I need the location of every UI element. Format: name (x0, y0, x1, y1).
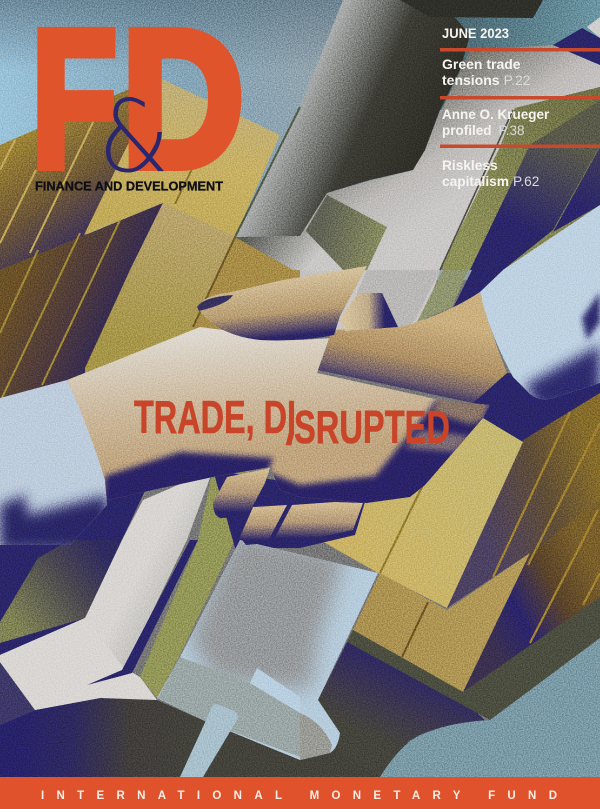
lower right box (320, 373, 600, 692)
teaser: riskless capitalism: Riskless (442, 158, 498, 173)
teaser: green trade: tensions (442, 72, 500, 88)
masthead logo (32, 0, 244, 208)
teaser: riskless capitalism: capitalism (442, 174, 509, 189)
issue date: JUNE 2023 (442, 25, 509, 41)
plunger stem (180, 704, 238, 777)
bottom dark curved base (0, 690, 380, 777)
left sleeve (0, 380, 107, 545)
right sleeve (480, 205, 600, 400)
footer bar (0, 777, 600, 809)
left arm and hand (67, 327, 490, 503)
left navy and olive face (0, 480, 150, 725)
rule one (440, 48, 600, 52)
grey tube (300, 17, 600, 340)
headline left half: TRADE, DI (134, 391, 296, 443)
sky background (0, 0, 600, 280)
ampersand: & (98, 78, 170, 195)
knuckle (340, 293, 398, 331)
teaser: Anne Krueger: Anne O. Krueger (442, 107, 550, 122)
teaser: Anne Krueger: P.38 (498, 123, 525, 138)
publisher name: INTERNATIONAL MONETARY FUND (41, 790, 557, 802)
dark plunger column (235, 0, 543, 272)
thumb (197, 266, 367, 340)
teaser: Anne Krueger: profiled (442, 123, 492, 138)
teaser: green trade: Green trade (442, 56, 521, 72)
masthead name: FINANCE AND DEVELOPMENT (35, 178, 223, 194)
teaser: green trade: P.22 (504, 72, 531, 88)
lower left box (0, 203, 300, 412)
right arm skin (318, 292, 507, 403)
fingers (213, 468, 363, 545)
white syringe stem (0, 470, 250, 710)
lower right shadow band and blue panel (300, 597, 600, 777)
contents sidebar (440, 25, 600, 189)
syringe body (157, 540, 378, 760)
headline (134, 391, 450, 453)
upper left box (0, 78, 280, 275)
teaser: riskless capitalism: P.62 (513, 174, 539, 189)
broken letter tail (286, 433, 294, 445)
right olive and navy stripes (345, 87, 600, 335)
rule two (440, 96, 600, 100)
headline right half: SRUPTED (294, 401, 450, 453)
rule three (440, 144, 600, 148)
navy behind fingers (213, 470, 367, 548)
